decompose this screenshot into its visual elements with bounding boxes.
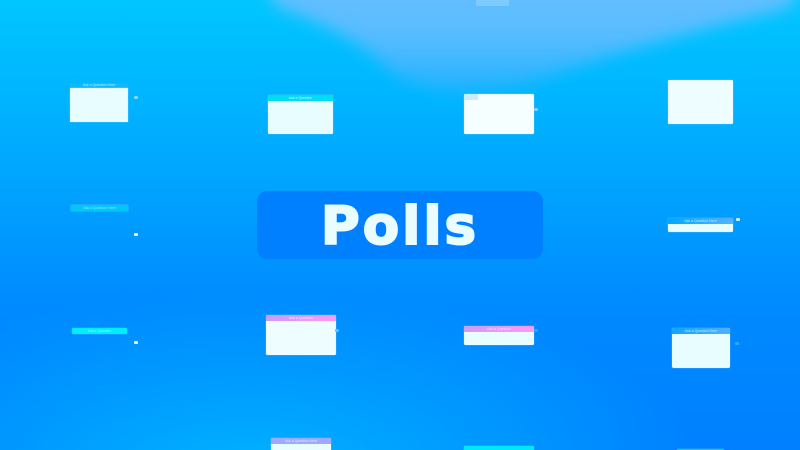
card header fragment [464,94,478,100]
title: Polls [321,196,479,257]
icon: cursor [534,108,538,111]
panel: poll card row 1 column 4 [668,80,733,124]
panel: poll card row 3 column 3 [464,326,534,345]
card header: Ask a Question [289,96,312,100]
bar text: Ask a Question Here [83,206,116,210]
panel: collapsed poll bar row 2 column 1 [71,205,128,211]
panel: poll card row 2 column 4 [668,218,733,232]
icon: cursor [134,341,138,344]
panel: poll card row 4 column 3 [464,446,534,450]
panel: poll card row 4 column 2 [271,438,331,450]
card header: Ask a Question Here [684,219,717,223]
panel: poll card row 1 column 3 [464,94,534,134]
card body [70,88,128,122]
panel: poll card row 1 column 2 [268,95,333,134]
icon: cursor [534,329,538,332]
icon: cursor [735,342,739,345]
card header: Ask a Question Here [685,329,717,333]
icon: cursor [736,218,740,221]
icon: cursor [134,96,138,99]
card header [464,326,534,332]
bar text: Ask a Question [88,329,111,333]
card header [268,95,333,101]
card header [266,315,336,321]
card header [668,218,733,224]
card header: Ask a Question Here [285,439,317,443]
panel: poll card row 4 column 4 [677,449,724,450]
icon: cursor [134,233,138,236]
panel: title plate [257,191,543,259]
card header [672,328,730,334]
panel: poll card row 3 column 2 [266,315,336,355]
card header [271,438,331,444]
icon: cursor [335,329,339,332]
card header text [70,83,128,88]
card header: Ask a Question [289,316,313,320]
card header: Ask a Question [487,327,511,331]
card header text: Ask a Question Here [83,83,115,87]
panel: collapsed poll bar row 3 column 1 [72,328,127,334]
faint top card [476,0,509,6]
panel: poll card row 3 column 4 [672,328,730,368]
panel: poll card row 1 column 1 [69,83,129,123]
